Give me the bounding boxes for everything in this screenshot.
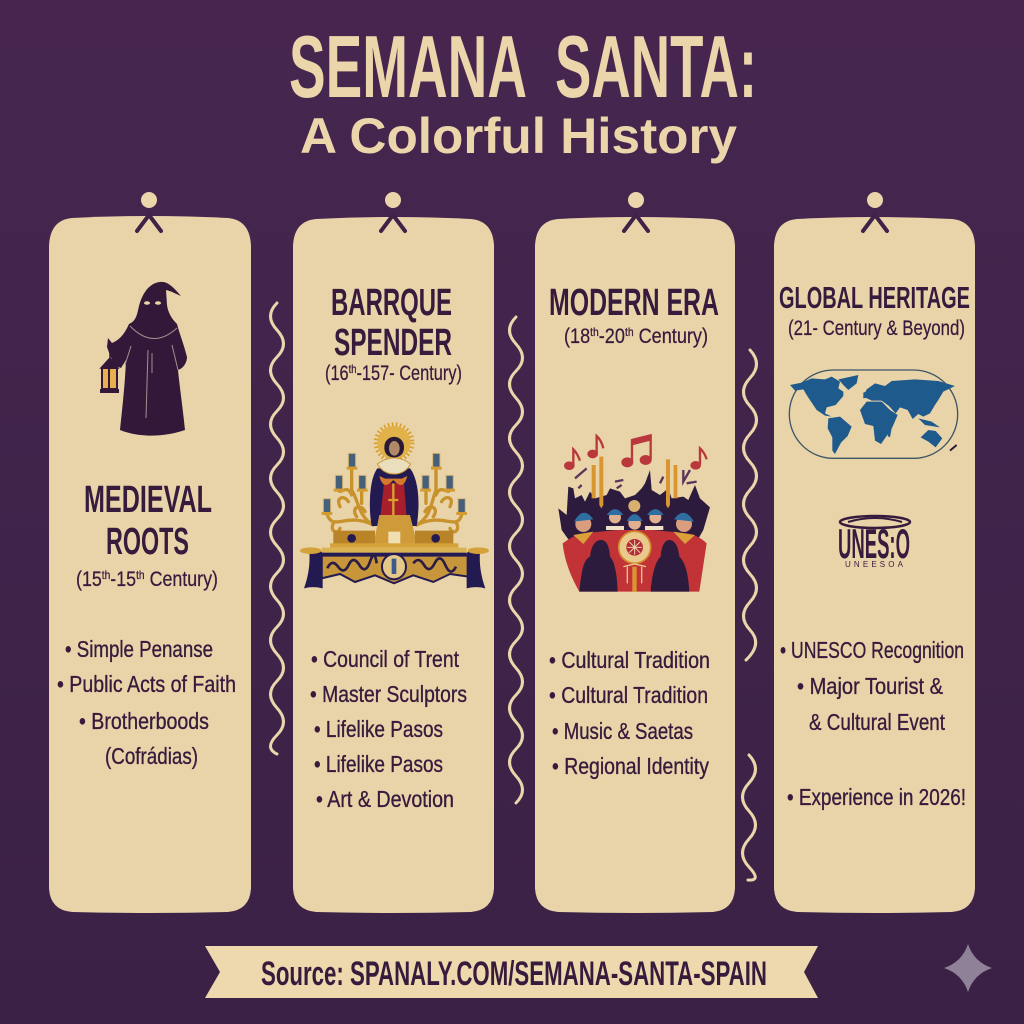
panel: baroque splendor [293,192,494,913]
period: th [136,568,145,582]
bullet list: • Lifelike Pasos [314,751,443,777]
bullet list: • Experience in 2026! [787,784,966,810]
heading: MODERN ERA [549,282,719,324]
candles [322,453,467,515]
panel: global heritage [774,192,975,913]
bullet list: & Cultural Event [809,709,945,735]
icon: UNESCO logo: UNEESOA [845,560,904,569]
base steps [373,515,417,545]
wavy connector: modern to global upper [744,350,756,660]
bullet list: • Council of Trent [311,646,460,672]
wavy connector: baroque to modern [510,317,522,803]
icon: baroque paso float [300,424,489,588]
panel: modern era [535,192,735,913]
heading [84,479,212,563]
figure robe [370,468,418,526]
sparkle star [944,944,992,992]
period: -157- Century) [356,362,462,385]
hanging pin [624,192,648,231]
card background [535,217,735,913]
heading: ROOTS [106,521,189,563]
card background [49,216,251,913]
card background [774,217,975,913]
bullet list: • UNESCO Recognition [780,637,964,663]
bullet list [57,636,236,769]
icon: hooded penitent with lantern [100,282,187,436]
red robes [563,530,707,592]
heading: MEDIEVAL [84,479,212,521]
period: (15 [76,568,106,591]
dark scattered glyphs [575,468,697,488]
heading [331,282,452,364]
icon: procession crowd and music [558,435,710,592]
bullet list: • Public Acts of Faith [57,671,236,697]
period: th [102,568,110,582]
period: Century) [634,325,708,348]
dark crowd [558,470,710,542]
bullet list: • Major Tourist & [797,673,943,699]
title: A Colorful History [300,108,737,164]
heading: SPENDER [334,322,452,364]
period: Century) [145,568,218,591]
candelabra [327,468,462,532]
period: (18 [564,325,594,348]
bullet list: • Cultural Tradition [549,682,708,708]
period: th [349,362,356,376]
halo [377,426,411,459]
hanging pin [137,192,161,231]
period: th [625,325,634,339]
central medallion [619,531,651,563]
wavy connector: medieval to baroque [270,303,284,754]
period: (21- Century & Beyond) [788,317,965,340]
hooded figures [579,540,618,592]
hanging pin [381,192,405,231]
source banner: Source: SPANALY.COM/SEMANA-SANTA-SPAIN [261,955,767,993]
bullet list: • Simple Penanse [65,636,213,662]
faces and caps [573,500,695,544]
hanging pin [863,192,887,231]
bullet list [780,637,966,810]
candles [592,457,677,508]
bullet list: • Master Sculptors [310,681,467,707]
music notes [564,435,707,470]
draped curtains [304,550,323,588]
bullet list: • Brotherboods [79,708,209,734]
title [289,17,757,164]
card background [293,217,494,913]
bullet list: • Regional Identity [552,753,709,779]
heading: BARRQUE [331,282,452,324]
source banner [205,946,818,998]
period: -20 [599,325,625,348]
bullet list: • Cultural Tradition [549,647,710,673]
bullet list [549,647,710,779]
bullet list: (Cofrádias) [105,743,198,769]
bullet list [310,646,467,812]
bullet list: • Art & Devotion [316,786,454,812]
title: SANTA: [555,17,757,116]
period: (16 [325,362,355,385]
panel: medieval roots [49,192,251,913]
period: -15 [110,568,136,591]
panel: global heritage: UNES:O [838,520,910,567]
bullet list: • Music & Saetas [552,718,693,744]
period: th [590,325,599,339]
icon: world map [789,370,958,458]
bullet list: • Lifelike Pasos [314,716,443,742]
title: SEMANA [289,17,527,116]
icon: UNESCO logo [838,516,910,569]
wavy connector: modern to global lower [742,755,756,880]
base ornament [327,555,456,572]
base body [322,556,468,583]
